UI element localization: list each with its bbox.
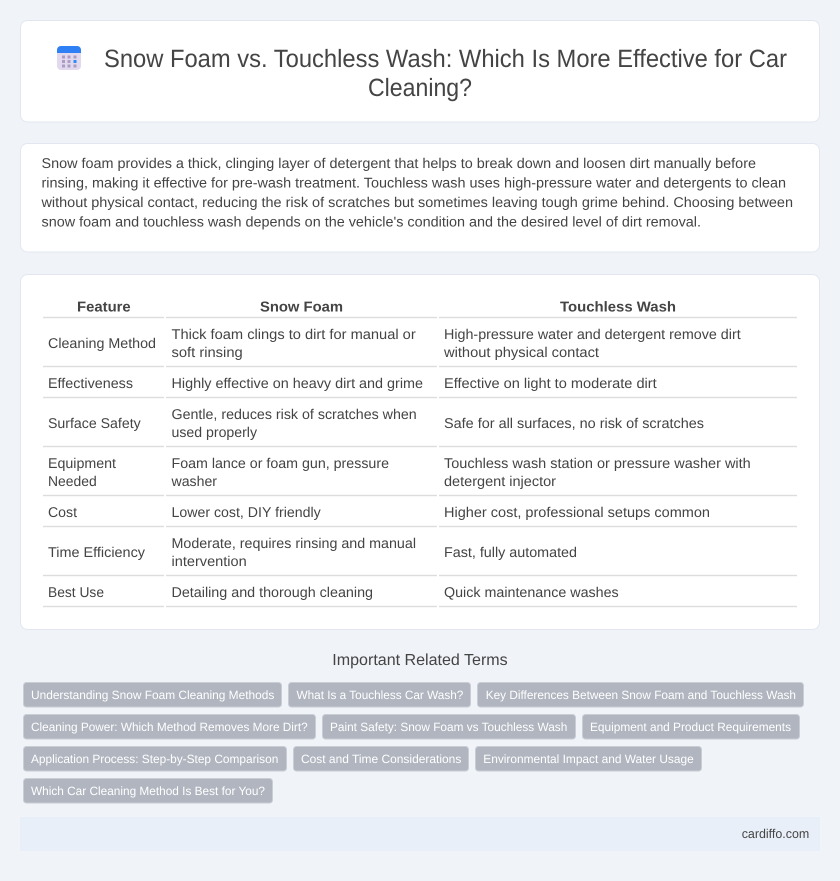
row: surface safety: Safe for all surfaces, no risk of scratches <box>444 416 704 432</box>
row: surface safety: used properly <box>172 425 258 441</box>
paragraph text: Snow foam provides a thick, clinging layer of detergent that helps to break down and loosen dirt manually before <box>42 156 756 172</box>
row: best use: Quick maintenance washes <box>444 585 619 601</box>
row: surface safety: Surface Safety <box>48 416 142 432</box>
row: best use: Best Use <box>48 585 104 601</box>
row: cost <box>48 505 710 521</box>
tag: understanding snow foam <box>24 682 282 707</box>
row: cost: Higher cost, professional setups common <box>444 505 710 521</box>
tag: environmental impact <box>476 746 702 771</box>
tag: environmental impact: Environmental Impact and Water Usage <box>483 752 694 766</box>
row: surface safety <box>48 407 704 441</box>
row: best use <box>48 585 619 601</box>
row: equipment needed: detergent injector <box>444 474 556 490</box>
row: surface safety: Gentle, reduces risk of scratches when <box>172 407 417 423</box>
paragraph text <box>40 156 793 230</box>
title: Cleaning? <box>368 74 472 102</box>
icon: calendar <box>57 46 81 70</box>
row: cleaning method <box>48 327 741 361</box>
row: cleaning method: without physical contact <box>443 345 599 361</box>
heading: related terms: Important Related Terms <box>332 652 508 669</box>
row: cost: Lower cost, DIY friendly <box>172 505 322 521</box>
tag: cost and time <box>294 746 468 771</box>
tag: key differences <box>478 682 804 707</box>
row: equipment needed: Foam lance or foam gun, pressure <box>172 456 389 472</box>
row: effectiveness: Effective on light to moderate dirt <box>444 376 657 392</box>
tag: which method is best: Which Car Cleaning Method Is Best for You? <box>31 784 265 798</box>
paragraph text: snow foam and touchless wash depends on the vehicle's condition and the desired level of dirt removal. <box>42 214 701 230</box>
row: equipment needed: Touchless wash station or pressure washer with <box>444 456 751 472</box>
panel: comparison table <box>20 274 820 630</box>
row: effectiveness: Highly effective on heavy dirt and grime <box>172 376 423 392</box>
row: time efficiency: Moderate, requires rinsing and manual <box>172 536 416 552</box>
panel: intro paragraph <box>20 144 820 252</box>
tag: touchless car wash: What Is a Touchless Car Wash? <box>296 688 464 702</box>
row: equipment needed <box>48 456 751 490</box>
row: time efficiency: Fast, fully automated <box>444 545 577 561</box>
tag: equipment requirements: Equipment and Product Requirements <box>590 720 791 734</box>
panel: title header <box>20 20 820 122</box>
tag: which method is best <box>24 778 272 803</box>
tag: application process <box>24 746 286 771</box>
tag: application process: Application Process: Step-by-Step Comparison <box>31 752 278 766</box>
row: time efficiency: intervention <box>172 554 247 570</box>
row: time efficiency <box>48 536 577 570</box>
related term tags <box>24 682 804 803</box>
row: cleaning method: soft rinsing <box>172 345 243 361</box>
row: time efficiency: Time Efficiency <box>48 545 146 561</box>
table header row: Feature <box>77 300 131 316</box>
paragraph text: without physical contact, reducing the risk of scratches but sometimes leaving tough grime behind. Choosing between <box>40 195 793 211</box>
table header row: Snow Foam <box>260 300 343 316</box>
footer bar <box>20 817 820 851</box>
tag: understanding snow foam: Understanding Snow Foam Cleaning Methods <box>31 688 274 702</box>
row: cleaning method: High-pressure water and detergent remove dirt <box>444 327 741 343</box>
tag: paint safety <box>322 714 576 739</box>
tag: touchless car wash <box>288 682 470 707</box>
tag: key differences: Key Differences Between Snow Foam and Touchless Wash <box>486 688 796 702</box>
table header row: Touchless Wash <box>560 300 676 316</box>
row: effectiveness: Effectiveness <box>48 376 133 392</box>
tag: cleaning power <box>24 714 316 739</box>
row: equipment needed: Equipment <box>48 456 116 472</box>
table header row <box>77 300 676 316</box>
paragraph text: rinsing, making it effective for pre-wash treatment. Touchless wash uses high-pressure water and detergents to clean <box>42 176 786 192</box>
tag: cost and time: Cost and Time Considerations <box>301 752 461 766</box>
tag: paint safety: Paint Safety: Snow Foam vs Touchless Wash <box>330 720 567 734</box>
row: effectiveness <box>48 376 657 392</box>
title <box>104 45 787 102</box>
row: best use: Detailing and thorough cleaning <box>172 585 373 601</box>
title: Snow Foam vs. Touchless Wash: Which Is More Effective for Car <box>104 45 787 73</box>
tag: cleaning power: Cleaning Power: Which Method Removes More Dirt? <box>31 720 308 734</box>
tag: equipment requirements <box>582 714 800 739</box>
footer bar: cardiffo.com <box>742 826 809 841</box>
row: cleaning method: Thick foam clings to dirt for manual or <box>172 327 416 343</box>
row: equipment needed: washer <box>171 474 217 490</box>
row: cleaning method: Cleaning Method <box>48 336 156 352</box>
row: cost: Cost <box>48 505 77 521</box>
row: equipment needed: Needed <box>48 474 97 490</box>
